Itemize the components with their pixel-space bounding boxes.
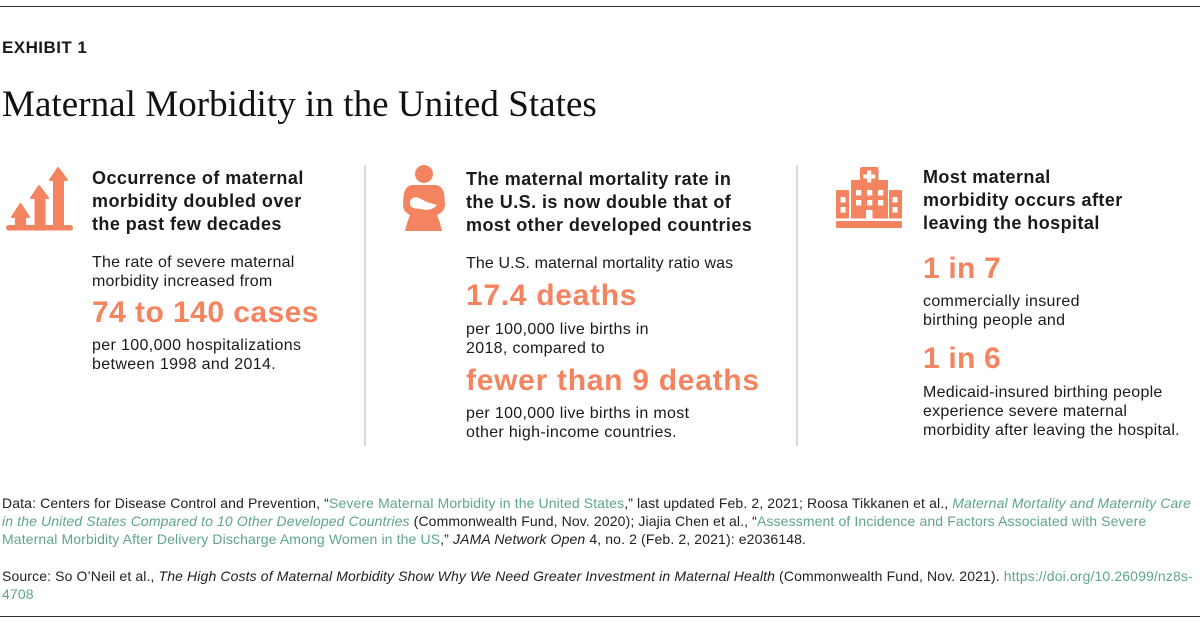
heading — [92, 168, 304, 234]
text: comparison — [466, 321, 649, 357]
panel: morbidity after leaving hospital — [836, 167, 1180, 439]
source note: Source: So O’Neil et al., The High Costs of Maternal Morbidity Show Why We Need Greater Investment in Maternal Health (Commonwealth Fund, Nov. 2021). https://doi.org/10.26099/nz8s- — [2, 568, 1193, 584]
text: commercially insured: commercially insured — [923, 293, 1080, 310]
text: rate detail: per 100,000 hospitalizations — [92, 337, 301, 354]
heading: The maternal mortality rate in — [466, 169, 731, 189]
source note — [2, 568, 1193, 602]
heading: morbidity occurs after — [923, 190, 1123, 210]
text: rate detail: between 1998 and 2014. — [92, 356, 276, 373]
text: medicaid insured — [923, 384, 1180, 439]
heading: the past few decades — [92, 214, 282, 234]
text: medicaid insured: Medicaid-insured birthing people — [923, 384, 1163, 401]
key figure: 1 in 6 — [923, 342, 1001, 375]
icon: mother holding baby — [403, 165, 445, 231]
heading: morbidity doubled over — [92, 191, 302, 211]
key figure: 74 to 140 cases — [92, 296, 319, 329]
source note: 4708 — [2, 586, 34, 602]
panel: maternal mortality rate — [403, 165, 760, 441]
text: other countries — [466, 405, 689, 441]
heading — [923, 167, 1123, 233]
heading: the U.S. is now double that of — [466, 192, 731, 212]
text: rate intro — [92, 254, 294, 290]
text: medicaid insured: morbidity after leaving the hospital. — [923, 422, 1180, 439]
heading: most other developed countries — [466, 215, 752, 235]
heading — [466, 169, 752, 235]
data note: in the United States Compared to 10 Other Developed Countries (Commonwealth Fund, Nov. 2020); Jiajia Chen et al., “Assessment of Incidence and Factors Associated with Severe — [2, 513, 1146, 529]
text: rate intro: The rate of severe maternal — [92, 254, 294, 271]
text: commercially insured: birthing people and — [923, 312, 1065, 329]
title: Maternal Morbidity in the United States — [2, 84, 597, 125]
text: other countries: per 100,000 live births in most — [466, 405, 689, 422]
text: ratio intro: The U.S. maternal mortality ratio was — [466, 255, 733, 272]
data note — [2, 495, 1191, 547]
text: rate detail — [92, 337, 301, 373]
key figure: 1 in 7 — [923, 252, 1001, 285]
text: comparison: per 100,000 live births in — [466, 321, 649, 338]
key figure: 17.4 deaths — [466, 279, 637, 312]
heading: leaving the hospital — [923, 213, 1100, 233]
data note: Maternal Morbidity After Delivery Discharge Among Women in the US,” JAMA Network Open 4, no. 2 (Feb. 2, 2021): e2036148. — [2, 531, 806, 547]
panel: occurrence of maternal morbidity — [6, 167, 319, 373]
text: rate intro: morbidity increased from — [92, 273, 272, 290]
text: commercially insured — [923, 293, 1080, 329]
text: other countries: other high-income countries. — [466, 424, 677, 441]
text: medicaid insured: experience severe maternal — [923, 403, 1127, 420]
icon: rising arrows — [6, 167, 73, 230]
heading: Most maternal — [923, 167, 1051, 187]
data note: Data: Centers for Disease Control and Prevention, “Severe Maternal Morbidity in the United States,” last updated Feb. 2, 2021; Roosa Tikkanen et al., Maternal Mortality and Maternity Care — [2, 495, 1191, 511]
icon: hospital — [836, 167, 902, 228]
text: comparison: 2018, compared to — [466, 340, 605, 357]
exhibit label: EXHIBIT 1 — [2, 38, 87, 57]
key figure: fewer than 9 deaths — [466, 364, 760, 397]
heading: Occurrence of maternal — [92, 168, 304, 188]
